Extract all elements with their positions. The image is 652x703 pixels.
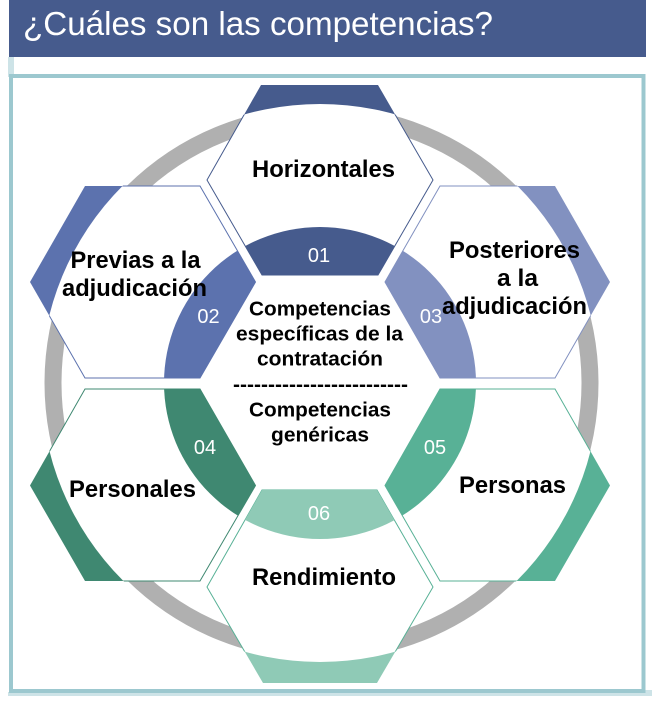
label: Rendimiento: Rendimiento bbox=[252, 564, 396, 591]
title banner bbox=[9, 0, 646, 57]
label: Posteriores a la adjudicación bbox=[442, 237, 587, 320]
number 02: 02 bbox=[197, 306, 220, 328]
label: Previas a la adjudicación: Previas a la bbox=[70, 247, 201, 274]
center text: Competencias genéricas bbox=[249, 400, 391, 446]
label: Posteriores a la adjudicación: adjudicación bbox=[442, 293, 587, 320]
label: Posteriores a la adjudicación: Posteriores bbox=[449, 237, 580, 264]
label: Horizontales: Horizontales bbox=[252, 156, 395, 183]
center text: Competencias específicas de la contratación: contratación bbox=[257, 348, 383, 370]
center text: Competencias específicas de la contratación bbox=[236, 298, 404, 370]
number 05: 05 bbox=[424, 437, 446, 459]
center divider dashes: ------------------------- bbox=[233, 374, 408, 396]
hexagon 02 Previas bbox=[30, 186, 256, 378]
center text: Competencias específicas de la contratación: específicas de la bbox=[236, 324, 404, 346]
label: Personas: Personas bbox=[459, 472, 566, 499]
number 04: 04 bbox=[194, 437, 216, 459]
number 03: 03 bbox=[420, 306, 442, 328]
label: Posteriores a la adjudicación: a la bbox=[497, 265, 539, 292]
label: Personales: Personales bbox=[69, 476, 196, 503]
center text: Competencias genéricas: Competencias bbox=[249, 400, 391, 422]
center text: Competencias genéricas: genéricas bbox=[271, 424, 369, 446]
hexagon 05 Personas bbox=[385, 389, 610, 581]
hexagon 04 Personales bbox=[30, 389, 256, 581]
hexagon 03 Posteriores bbox=[385, 186, 610, 378]
label: Previas a la adjudicación: adjudicación bbox=[62, 275, 207, 302]
label: Previas a la adjudicación bbox=[62, 247, 207, 302]
hexagon 06 Rendimiento bbox=[207, 490, 433, 683]
center text: Competencias específicas de la contratación: Competencias bbox=[249, 298, 391, 320]
number 06: 06 bbox=[308, 503, 330, 525]
gray ring bbox=[53, 114, 590, 652]
title banner: ¿Cuáles son las competencias? bbox=[23, 5, 493, 42]
number 01: 01 bbox=[308, 245, 330, 267]
hexagon 01 Horizontales bbox=[207, 85, 433, 275]
